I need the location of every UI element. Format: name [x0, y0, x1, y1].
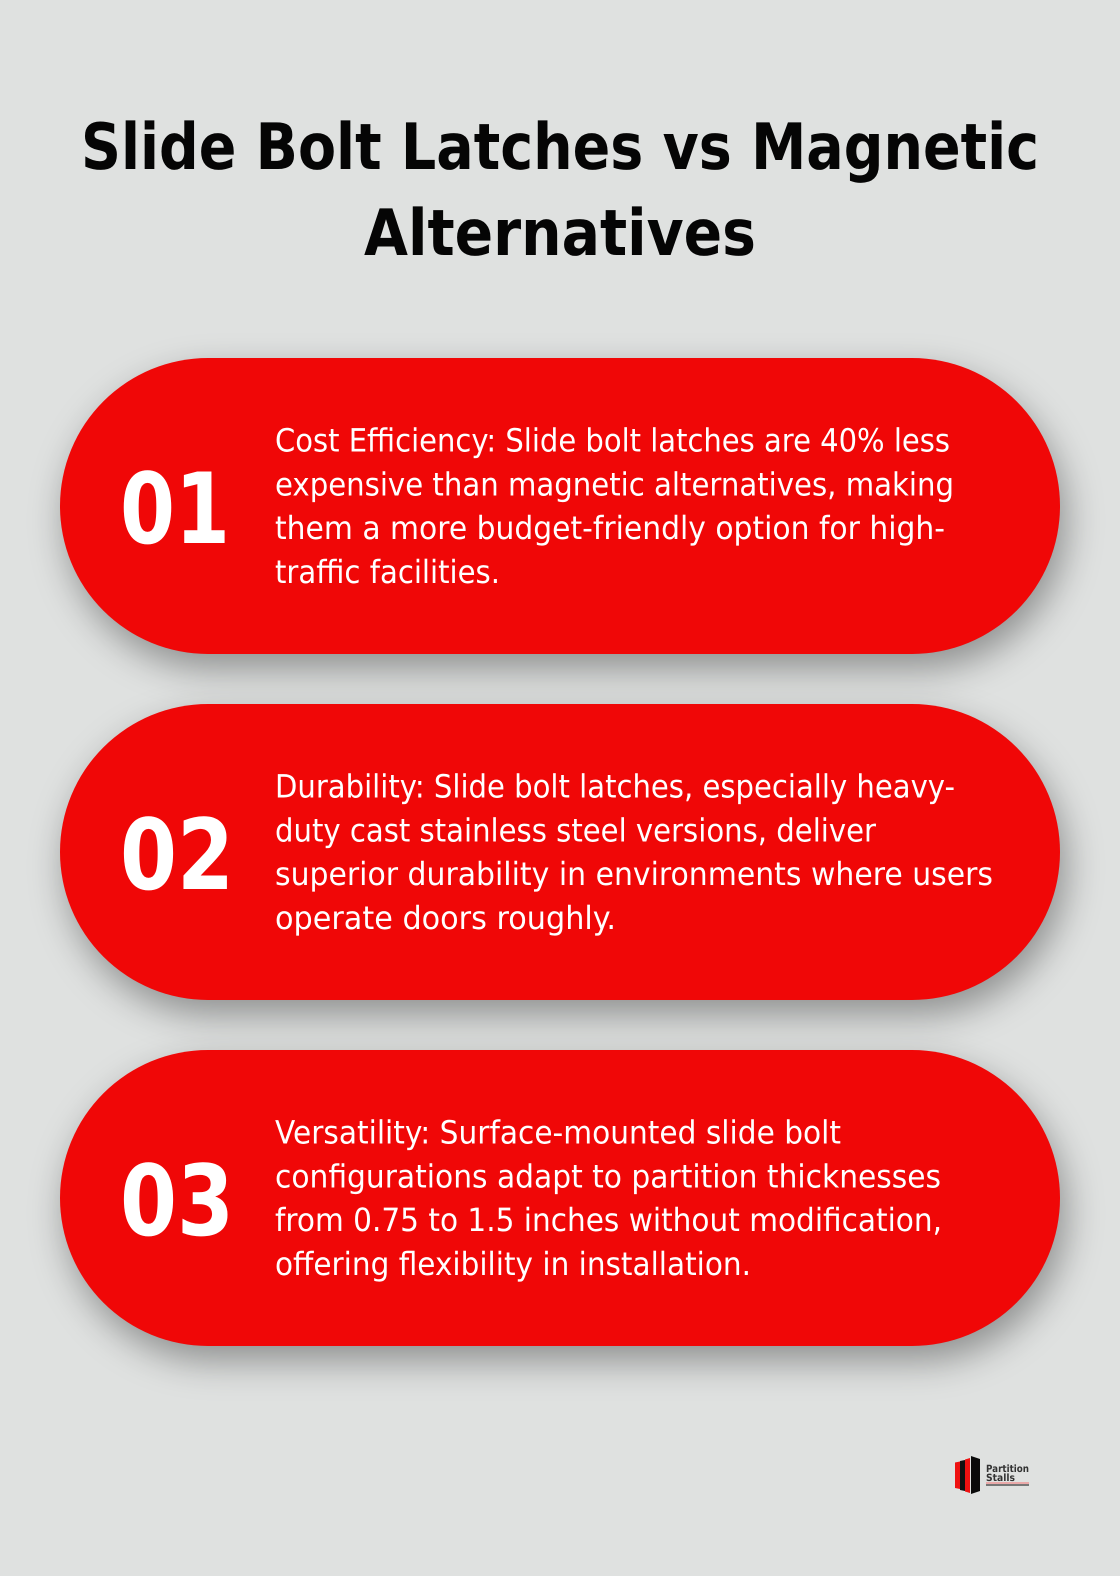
title [81, 111, 1039, 271]
panel: cost efficiency [60, 358, 1060, 654]
text: cost efficiency: Cost Efficiency: Slide bolt latches are 40% less [275, 422, 950, 460]
text: cost efficiency [275, 422, 954, 591]
title: Alternatives [364, 197, 756, 271]
wordmark: Stalls [986, 1473, 1015, 1484]
text: versatility: Versatility: Surface-mounted slide bolt [275, 1114, 841, 1152]
number 01: 01 [120, 453, 230, 567]
text: durability [275, 768, 993, 937]
text: versatility: from 0.75 to 1.5 inches without modification, [275, 1201, 942, 1239]
text: versatility [275, 1114, 942, 1283]
wordmark [986, 1464, 1029, 1486]
text: durability: operate doors roughly. [275, 899, 616, 937]
text: durability: duty cast stainless steel versions, deliver [275, 812, 877, 850]
icon: partition panels [955, 1456, 980, 1494]
text: durability: Durability: Slide bolt latches, especially heavy- [275, 768, 955, 806]
text: versatility: offering flexibility in installation. [275, 1245, 751, 1283]
text: cost efficiency: expensive than magnetic alternatives, making [275, 466, 954, 504]
text: cost efficiency: traffic facilities. [275, 553, 500, 591]
wordmark: Partition [986, 1464, 1029, 1475]
text: cost efficiency: them a more budget-friendly option for high- [275, 509, 945, 547]
text: durability: superior durability in environments where users [275, 855, 993, 893]
panel: versatility [60, 1050, 1060, 1346]
logo: Partition Stalls [955, 1456, 1029, 1494]
number 02: 02 [120, 799, 234, 913]
number 03: 03 [120, 1145, 234, 1259]
panel: durability [60, 704, 1060, 1000]
text: versatility: configurations adapt to partition thicknesses [275, 1158, 941, 1196]
